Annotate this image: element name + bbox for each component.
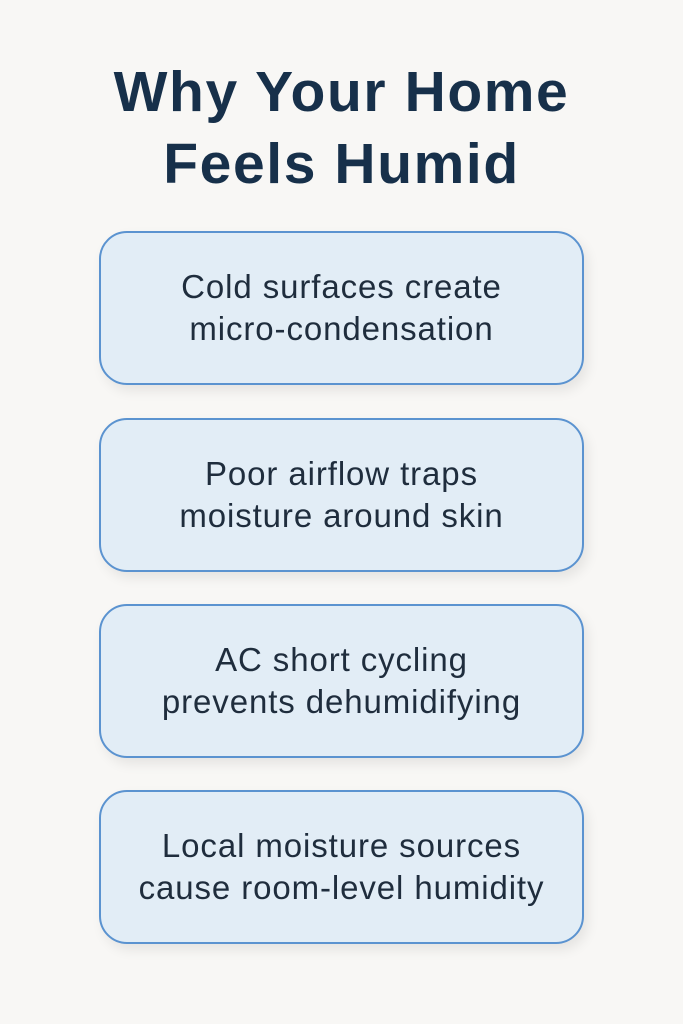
card: cold surfaces: Cold surfaces create bbox=[181, 268, 502, 305]
title: Why Your Home bbox=[114, 60, 569, 124]
title: Feels Humid bbox=[163, 132, 520, 196]
card: poor airflow: Poor airflow traps bbox=[205, 455, 478, 492]
card: AC short cycling: prevents dehumidifying bbox=[162, 683, 521, 720]
card: local moisture sources bbox=[99, 790, 584, 944]
card: local moisture sources: cause room-level humidity bbox=[139, 869, 544, 906]
card: cold surfaces bbox=[99, 231, 584, 385]
title bbox=[114, 60, 569, 196]
card: poor airflow: moisture around skin bbox=[179, 497, 504, 534]
card: local moisture sources: Local moisture sources bbox=[162, 827, 521, 864]
card: poor airflow bbox=[99, 418, 584, 572]
card: AC short cycling bbox=[99, 604, 584, 758]
card: AC short cycling: AC short cycling bbox=[215, 641, 468, 678]
card: cold surfaces: micro-condensation bbox=[189, 310, 494, 347]
